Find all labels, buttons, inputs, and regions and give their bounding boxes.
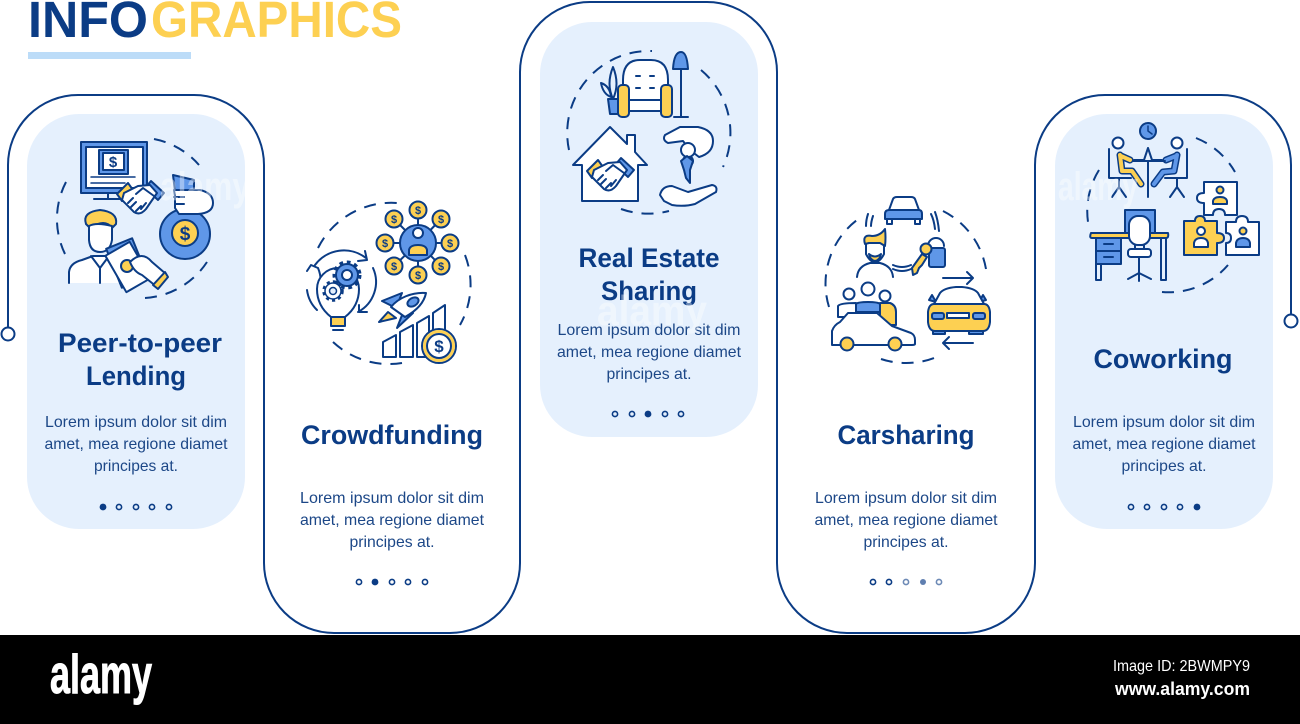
text block: amet, mea regione diamet: [557, 344, 742, 361]
heading: Coworking: [1094, 344, 1232, 374]
pagination dots: [1128, 504, 1200, 510]
icon: coworking illustration: [1087, 123, 1259, 292]
faint image watermarks: alamy: [1058, 165, 1139, 209]
text block: Lorem ipsum dolor sit dim: [300, 490, 484, 507]
text block: amet, mea regione diamet: [44, 436, 228, 453]
heading: [578, 243, 720, 306]
icon: crowdfunding illustration: [307, 202, 471, 364]
text block: principes at.: [94, 458, 178, 475]
title underline: [28, 52, 191, 59]
icon: crowdfunding illustration: $: [391, 214, 397, 226]
pagination dots: [870, 579, 942, 585]
panel: coworking: [1072, 123, 1259, 510]
panel backgrounds: [27, 22, 1273, 529]
pagination dots: [100, 504, 172, 510]
icon: crowdfunding illustration: $: [434, 337, 444, 356]
text block: [300, 490, 485, 551]
text block: principes at.: [606, 366, 692, 383]
icon: crowdfunding illustration: $: [391, 261, 397, 273]
icon: crowdfunding illustration: $: [382, 238, 388, 250]
faint image watermarks: alamy: [160, 165, 251, 209]
icon: carsharing illustration: [826, 197, 990, 363]
icon: crowdfunding illustration: $: [438, 214, 444, 226]
text block: [44, 414, 228, 475]
pagination dots: [356, 579, 428, 585]
heading: Sharing: [601, 276, 697, 306]
heading: [58, 328, 223, 391]
text block: [557, 322, 742, 383]
faint image watermarks: [160, 165, 1139, 334]
logo: alamy: [50, 643, 152, 705]
text block: principes at.: [864, 534, 948, 551]
icon: lending illustration: $: [180, 224, 191, 245]
pagination dots: [612, 411, 684, 417]
heading: Lending: [86, 361, 186, 391]
text block: Lorem ipsum dolor sit dim: [558, 322, 740, 339]
image id: Image ID: 2BWMPY9: [1113, 658, 1250, 675]
panel: carsharing: [814, 197, 998, 585]
icon: lending illustration: $: [109, 154, 118, 171]
text block: amet, mea regione diamet: [1072, 436, 1256, 453]
icon: crowdfunding illustration: $: [438, 261, 444, 273]
heading: Carsharing: [838, 420, 974, 450]
text block: Lorem ipsum dolor sit dim: [1073, 414, 1255, 431]
panel: peer-to-peer lending: [44, 139, 228, 510]
watermark band: [0, 635, 1300, 724]
text block: amet, mea regione diamet: [300, 512, 485, 529]
text block: principes at.: [1122, 458, 1206, 475]
icon: lending illustration: [57, 139, 213, 298]
icon: real estate illustration: [567, 51, 730, 214]
icon: crowdfunding illustration: $: [415, 205, 421, 217]
faint image watermarks: alamy: [597, 287, 708, 334]
panel: crowdfunding: [300, 202, 485, 585]
text block: Lorem ipsum dolor sit dim: [45, 414, 227, 431]
heading: Crowdfunding: [301, 420, 483, 450]
title: [28, 0, 402, 48]
text block: [1072, 414, 1256, 475]
text block: Lorem ipsum dolor sit dim: [815, 490, 997, 507]
icon: crowdfunding illustration: $: [415, 270, 421, 282]
panel: real estate sharing: [557, 51, 742, 417]
icon: crowdfunding illustration: $: [447, 238, 453, 250]
heading: Real Estate: [578, 243, 720, 273]
text block: amet, mea regione diamet: [814, 512, 998, 529]
site url: www.alamy.com: [1114, 679, 1250, 699]
heading: Peer-to-peer: [58, 328, 223, 358]
text block: principes at.: [350, 534, 434, 551]
text block: [814, 490, 998, 551]
